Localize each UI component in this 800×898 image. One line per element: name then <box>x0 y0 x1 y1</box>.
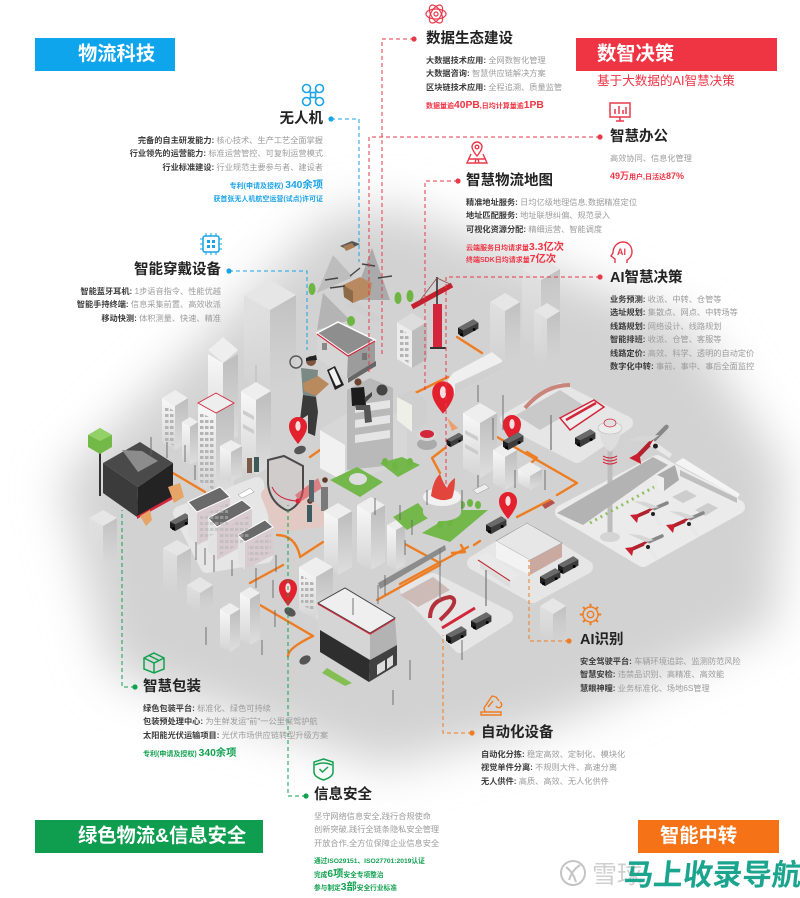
stats: 终端SDK日均请求量7亿次 <box>466 254 556 265</box>
panel: 自动化设备 <box>481 724 625 786</box>
heading: 智慧物流地图 <box>466 173 553 189</box>
heading: 数据生态建设 <box>426 31 513 47</box>
feature list: 包装预处理中心: 为生鲜发运"前"一公里保驾护航 <box>143 717 318 726</box>
sorting facility lower <box>378 545 491 644</box>
stats: 专利(申请及授权) 340余项 <box>230 180 323 191</box>
heading: 智能穿戴设备 <box>134 262 221 278</box>
stats: 通过ISO29151、ISO27701:2019认证 <box>314 858 425 865</box>
icon: map pin <box>466 141 488 164</box>
heading: 信息安全 <box>314 787 372 803</box>
feature list: 慧眼神瞳: 业务标准化、场地6S管理 <box>580 684 710 693</box>
feature list <box>481 750 625 786</box>
mountains and hills <box>308 248 414 330</box>
delivery van <box>458 319 478 337</box>
feature list: 无人供件: 高质、高效、无人化供件 <box>481 777 609 786</box>
feature list: 可视化资源分配: 精细运营、智能调度 <box>466 225 602 234</box>
three grey dormitories <box>188 487 273 570</box>
watermark headline: 马上收录导航 <box>622 859 800 892</box>
feature list: 数字化中转: 事前、事中、事后全面监控 <box>610 362 754 371</box>
stats: 获首张无人机航空运营(试点)许可证 <box>213 196 323 203</box>
orange routes <box>173 337 577 656</box>
map block and red drum <box>397 390 458 450</box>
heading: 自动化设备 <box>481 725 554 741</box>
drone with parcel <box>325 241 392 303</box>
security shield <box>268 456 322 511</box>
construction building <box>397 313 427 368</box>
faded background towers <box>89 258 566 642</box>
feature list: 太阳能光伏运输项目: 光伏市场供应链转型升级方案 <box>143 731 328 740</box>
cars and small vans <box>238 432 555 534</box>
panel: 数据生态建设 <box>426 30 562 111</box>
feature list: 大数据技术应用: 全网数智化管理 <box>426 56 546 65</box>
black cube station with green sign <box>88 428 190 531</box>
panel: 智能穿戴设备 <box>77 261 221 323</box>
banner: 智能中转: 智能中转 <box>660 826 737 847</box>
red roof warehouse <box>317 322 376 383</box>
heading: 智慧包装 <box>143 679 201 695</box>
description: 开放合作,全方位保障企业信息安全 <box>314 839 439 848</box>
icon: AI head <box>610 241 633 263</box>
stats <box>213 179 323 203</box>
feature list <box>143 704 328 740</box>
feature list: 安全驾驶平台: 车辆环境追踪、监测防范风险 <box>580 657 741 666</box>
feature list: 线路定价: 高效、科学、透明的自动定价 <box>610 349 754 358</box>
feature list <box>466 198 637 234</box>
control tower <box>598 419 622 542</box>
feature list: 完备的自主研发能力: 核心技术、生产工艺全面掌握 <box>138 136 323 145</box>
feature list: 地址匹配服务: 地址联想纠偏、规范录入 <box>466 211 610 220</box>
courier figure with parcel <box>290 355 344 436</box>
subtitle: 基于大数据的AI智慧决策: 基于大数据的AI智慧决策 <box>597 74 735 88</box>
feature list: 精准地址服务: 日均亿级地理信息,数据精准定位 <box>466 198 637 207</box>
stats: 专利(申请及授权) 340余项 <box>143 748 236 759</box>
red tower crane <box>412 277 452 348</box>
banner: 绿色物流&信息安全: 绿色物流&信息安全 <box>78 826 246 847</box>
panel: 智慧物流地图 <box>466 172 637 265</box>
center curved office tower <box>320 378 407 482</box>
long building <box>448 352 502 394</box>
banner: 数智决策: 数智决策 <box>597 44 674 65</box>
panel: AI智慧决策 <box>610 269 754 371</box>
feature list: 智能排班: 收派、仓管、客服等 <box>610 335 721 344</box>
icon: data atom <box>425 4 447 24</box>
feature list: 智能蓝牙耳机: 1步语音指令、性能优越 <box>80 287 221 296</box>
feature list: 线路规划: 网络设计、线路规划 <box>610 322 721 331</box>
stats: 完成6项安全专项整治 <box>314 869 384 880</box>
stats: 云端服务日均请求量3.3亿次 <box>466 242 564 253</box>
panel: 无人机 <box>130 110 323 203</box>
banner: 绿色物流&信息安全 <box>35 820 263 853</box>
runway and terminal <box>557 457 740 525</box>
feature list: 区块链技术应用: 全程追溯、质量监管 <box>426 83 562 92</box>
feature list: 选址规划: 集散点、网点、中转场等 <box>610 308 738 317</box>
watermark logo <box>560 860 586 886</box>
seated man with laptop <box>351 378 372 423</box>
banner: 数智决策 <box>576 38 777 71</box>
icon: gear <box>580 604 602 626</box>
description: 坚守网络信息安全,践行合规使命 <box>314 812 431 821</box>
icon: package box <box>143 652 165 674</box>
icon: drone <box>302 84 324 106</box>
panel: AI识别 <box>580 632 741 693</box>
heading: AI识别 <box>580 632 624 648</box>
left city towers <box>162 337 271 495</box>
feature list: 移动快测: 体积测量、快速、精准 <box>101 314 221 323</box>
feature list: 行业标准建设: 行业规范主要参与者、建设者 <box>162 163 323 172</box>
banner: 智能中转 <box>638 820 779 853</box>
banner: 物流科技 <box>35 38 175 71</box>
center tower row <box>220 497 405 652</box>
warehouse with trucks <box>477 523 578 606</box>
icon: monitor <box>609 102 631 122</box>
heading: AI智慧决策 <box>610 270 682 286</box>
feature list <box>610 295 754 371</box>
stats: 参与制定3部安全行业标准 <box>314 882 397 893</box>
feature list <box>130 136 323 172</box>
description: 创新突破,践行全链条隐私安全管理 <box>314 825 439 834</box>
store front building <box>318 588 397 686</box>
street lamps <box>151 385 545 705</box>
panel: 智慧办公 <box>610 128 692 181</box>
right city towers <box>463 403 542 490</box>
stats <box>314 857 425 893</box>
people near shield <box>247 457 328 522</box>
feature list: 绿色包装平台: 标准化、绿色可持续 <box>143 704 271 713</box>
block platforms <box>180 390 738 646</box>
map pins <box>279 381 521 606</box>
heading: 智慧办公 <box>610 129 668 145</box>
feature list <box>77 287 221 323</box>
panel: 智慧包装 <box>143 678 328 759</box>
watermark text: 雪球 <box>592 861 642 889</box>
ground shadow <box>60 208 785 768</box>
feature list: 行业领先的运营能力: 标准运营管控、可复制运营模式 <box>130 149 323 158</box>
stats <box>466 241 564 265</box>
sorting facility upper <box>516 385 604 450</box>
feature list: 业务预测: 收派、中转、仓管等 <box>610 295 721 304</box>
feature list <box>580 656 741 693</box>
stats: 数据量逾40PB,日均计算量逾1PB <box>426 100 544 111</box>
heading: 无人机 <box>280 111 323 127</box>
description <box>314 812 439 848</box>
airplanes <box>623 424 703 560</box>
feature list: 自动化分拣: 稳定高效、定制化、模块化 <box>481 750 625 759</box>
panel: 信息安全 <box>314 786 439 893</box>
banner: 物流科技: 物流科技 <box>78 44 155 65</box>
stats: 49万用户,日活达87% <box>610 171 684 181</box>
description: 高效协同、信息化管理 <box>610 154 692 163</box>
feature list: 智慧安检: 违禁品识别、高精准、高效能 <box>580 670 724 679</box>
feature list <box>426 56 562 92</box>
motorcycles <box>283 444 312 666</box>
icon: robot arm <box>480 695 502 716</box>
feature list: 智能手持终端: 信息采集前置、高效收派 <box>77 300 221 309</box>
icon: AI head: AI <box>617 247 626 257</box>
icon: wearable chip <box>200 233 222 255</box>
icon: security shield <box>313 758 334 781</box>
flame monument <box>423 474 461 521</box>
green parks <box>330 457 488 542</box>
feature list: 大数据咨询: 智慧供应链解决方案 <box>426 69 546 78</box>
feature list: 视觉单件分离: 不规则大件、高速分离 <box>481 763 617 772</box>
